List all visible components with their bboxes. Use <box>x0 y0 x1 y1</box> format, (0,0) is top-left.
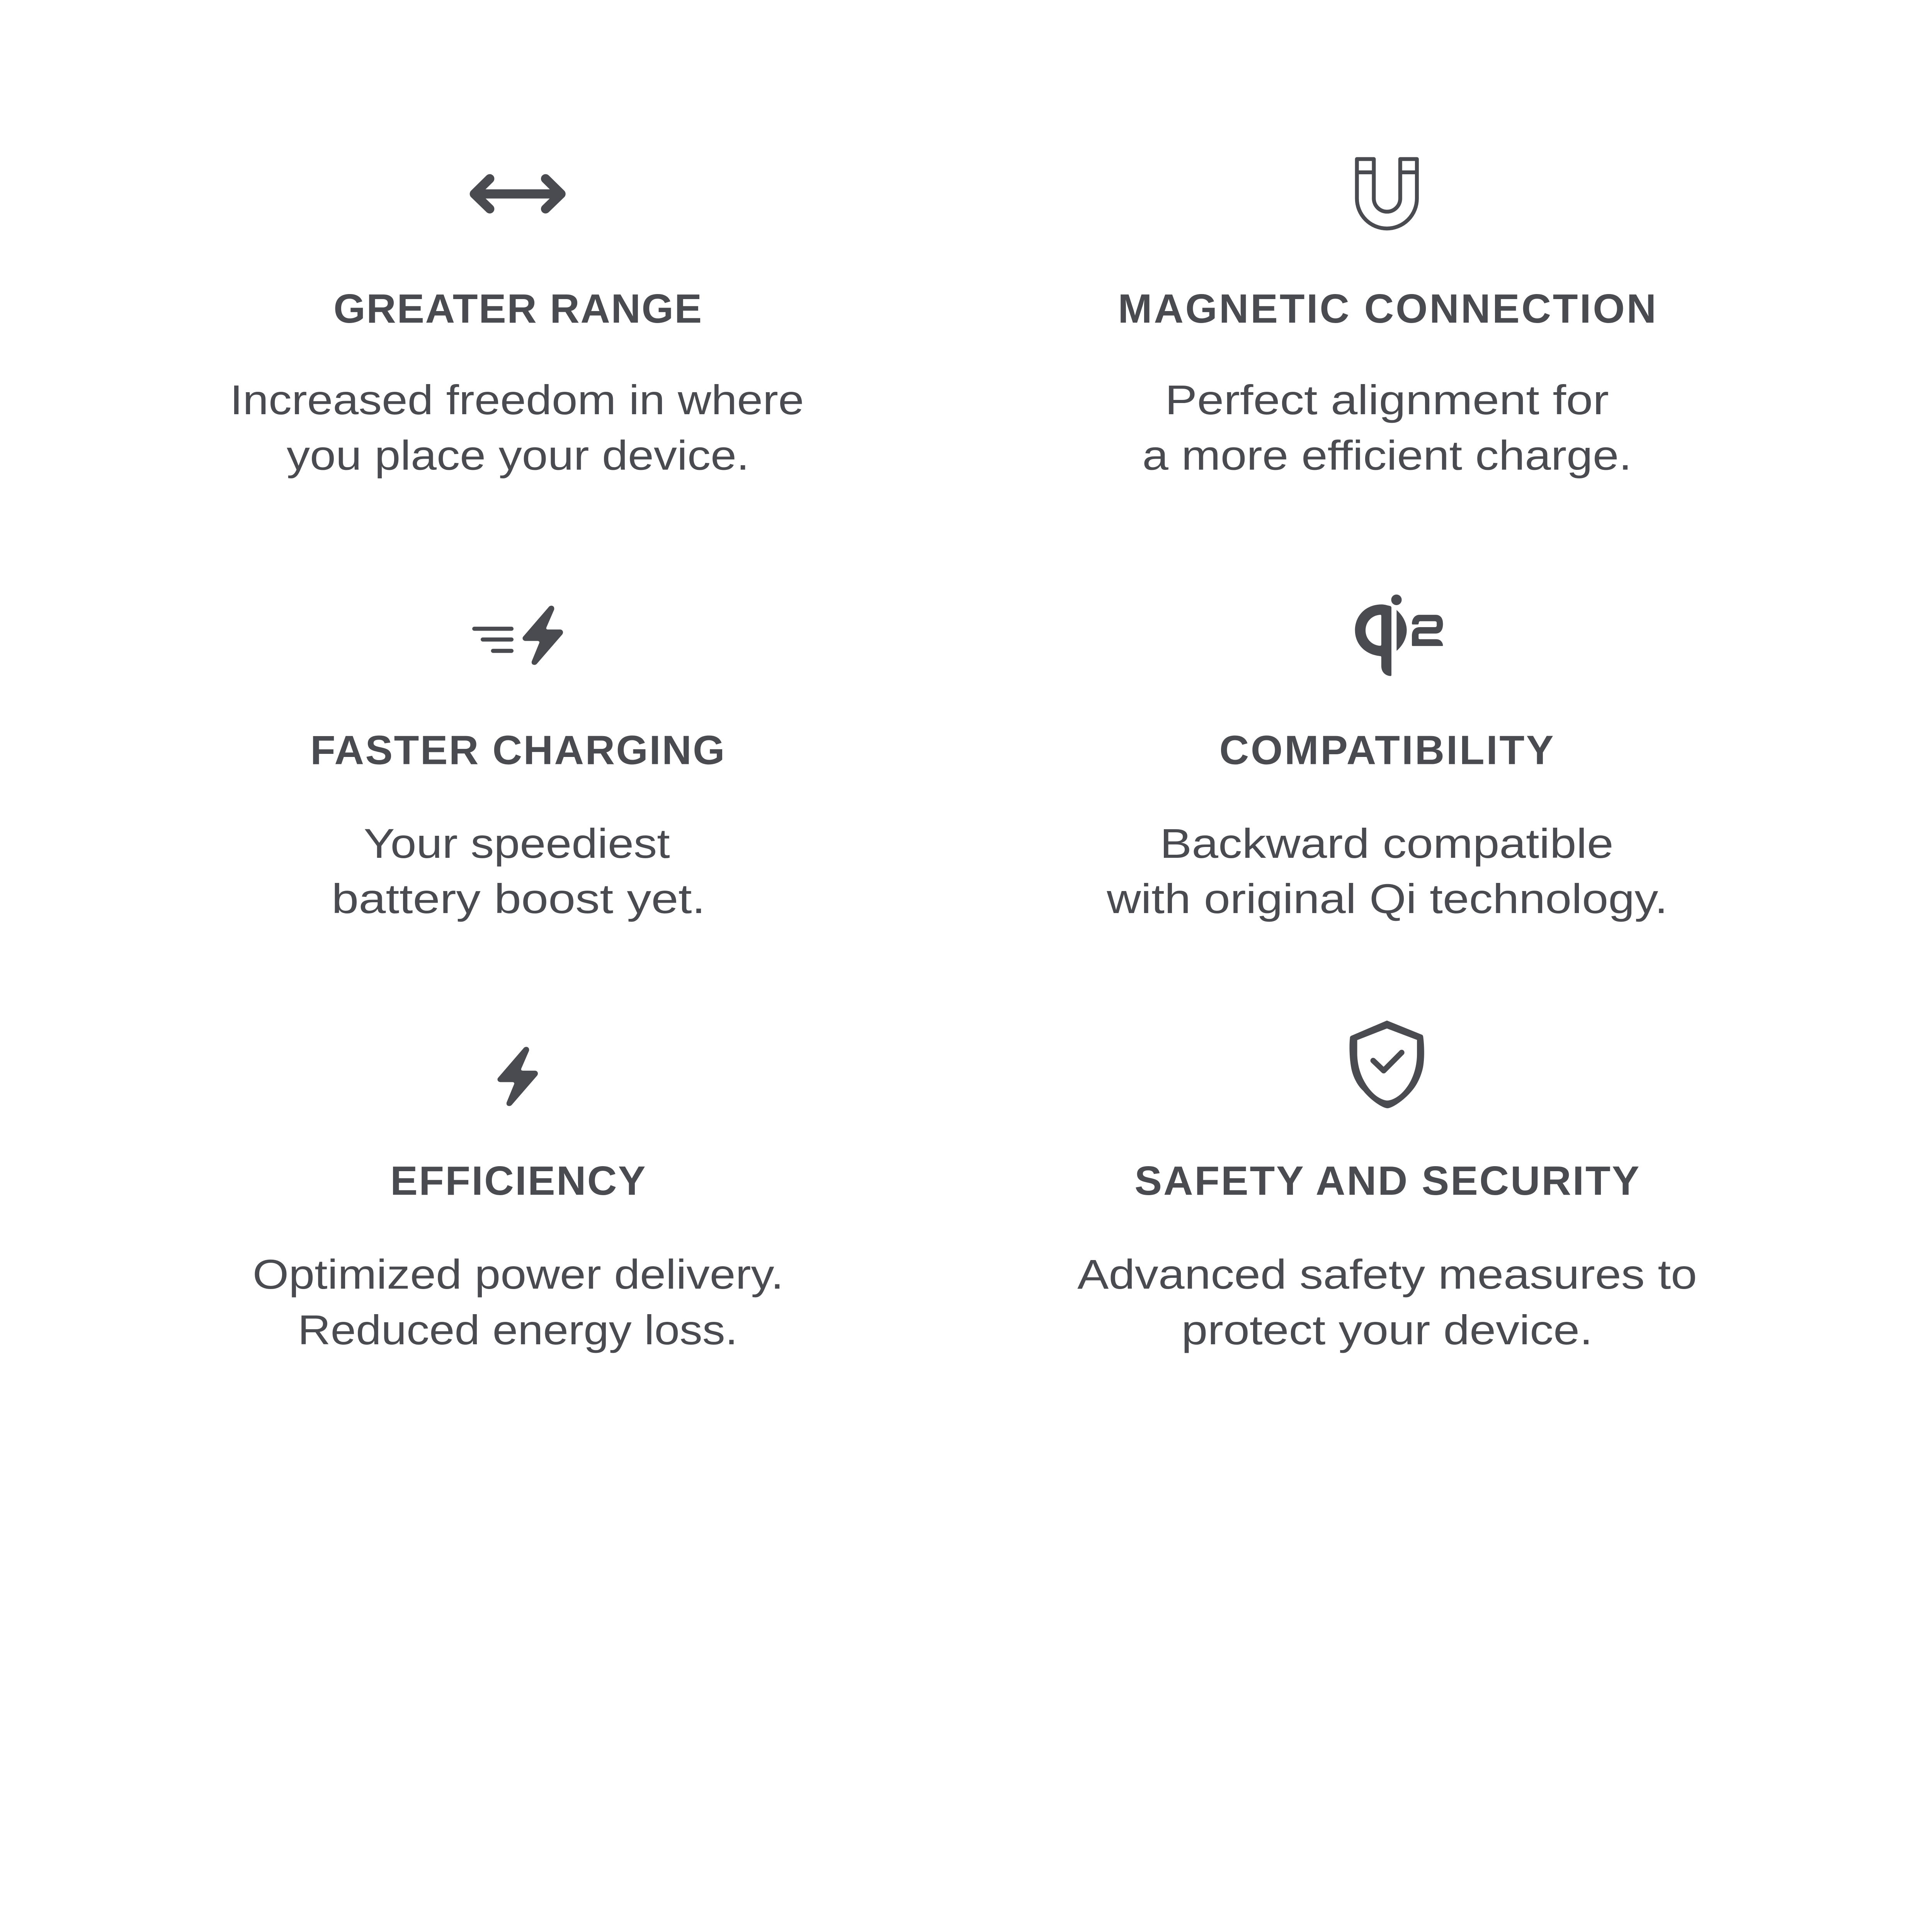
heading: efficiency: EFFICIENCY <box>390 1158 646 1204</box>
description: efficiency: Reduced energy loss. <box>298 1306 738 1353</box>
heading: compatibility: COMPATIBILITY <box>1219 727 1554 773</box>
description: faster charging: Your speediest <box>364 820 670 867</box>
panel: faster charging <box>310 606 725 922</box>
description: efficiency <box>253 1251 784 1353</box>
description: greater range: you place your device. <box>287 432 749 479</box>
icon: horseshoe magnet <box>1357 159 1417 228</box>
description: magnetic connection: a more efficient charge. <box>1142 432 1632 479</box>
panel: compatibility <box>1106 595 1668 922</box>
heading: safety and security: SAFETY AND SECURITY <box>1134 1158 1639 1204</box>
icon: lightning bolt <box>497 1047 538 1106</box>
description: faster charging: battery boost yet. <box>332 875 706 922</box>
icon: shield with check mark <box>1349 1020 1424 1108</box>
description: greater range <box>230 376 804 479</box>
icon: speed lines and lightning bolt <box>474 606 563 665</box>
description: safety and security: Advanced safety measures to <box>1077 1251 1697 1298</box>
description: compatibility: Backward compatible <box>1160 820 1614 867</box>
description: efficiency: Optimized power delivery. <box>253 1251 784 1298</box>
heading: greater range: GREATER RANGE <box>333 286 702 332</box>
panel: greater range <box>230 179 804 479</box>
description: safety and security: protect your device. <box>1182 1306 1593 1353</box>
panel: efficiency <box>253 1047 784 1353</box>
icon: double-headed arrow <box>474 179 561 209</box>
description: safety and security <box>1077 1251 1697 1353</box>
description: compatibility: with original Qi technology. <box>1106 875 1668 922</box>
description: greater range: Increased freedom in where <box>230 376 804 423</box>
description: magnetic connection <box>1142 376 1632 479</box>
heading: faster charging: FASTER CHARGING <box>310 727 725 773</box>
description: magnetic connection: Perfect alignment for <box>1165 376 1609 423</box>
description: compatibility <box>1106 820 1668 922</box>
description: faster charging <box>332 820 706 922</box>
heading: magnetic connection: MAGNETIC CONNECTION <box>1118 286 1656 332</box>
panel: safety and security <box>1077 1020 1697 1353</box>
panel: magnetic connection <box>1118 159 1656 479</box>
icon: Qi2 logo <box>1355 595 1443 676</box>
